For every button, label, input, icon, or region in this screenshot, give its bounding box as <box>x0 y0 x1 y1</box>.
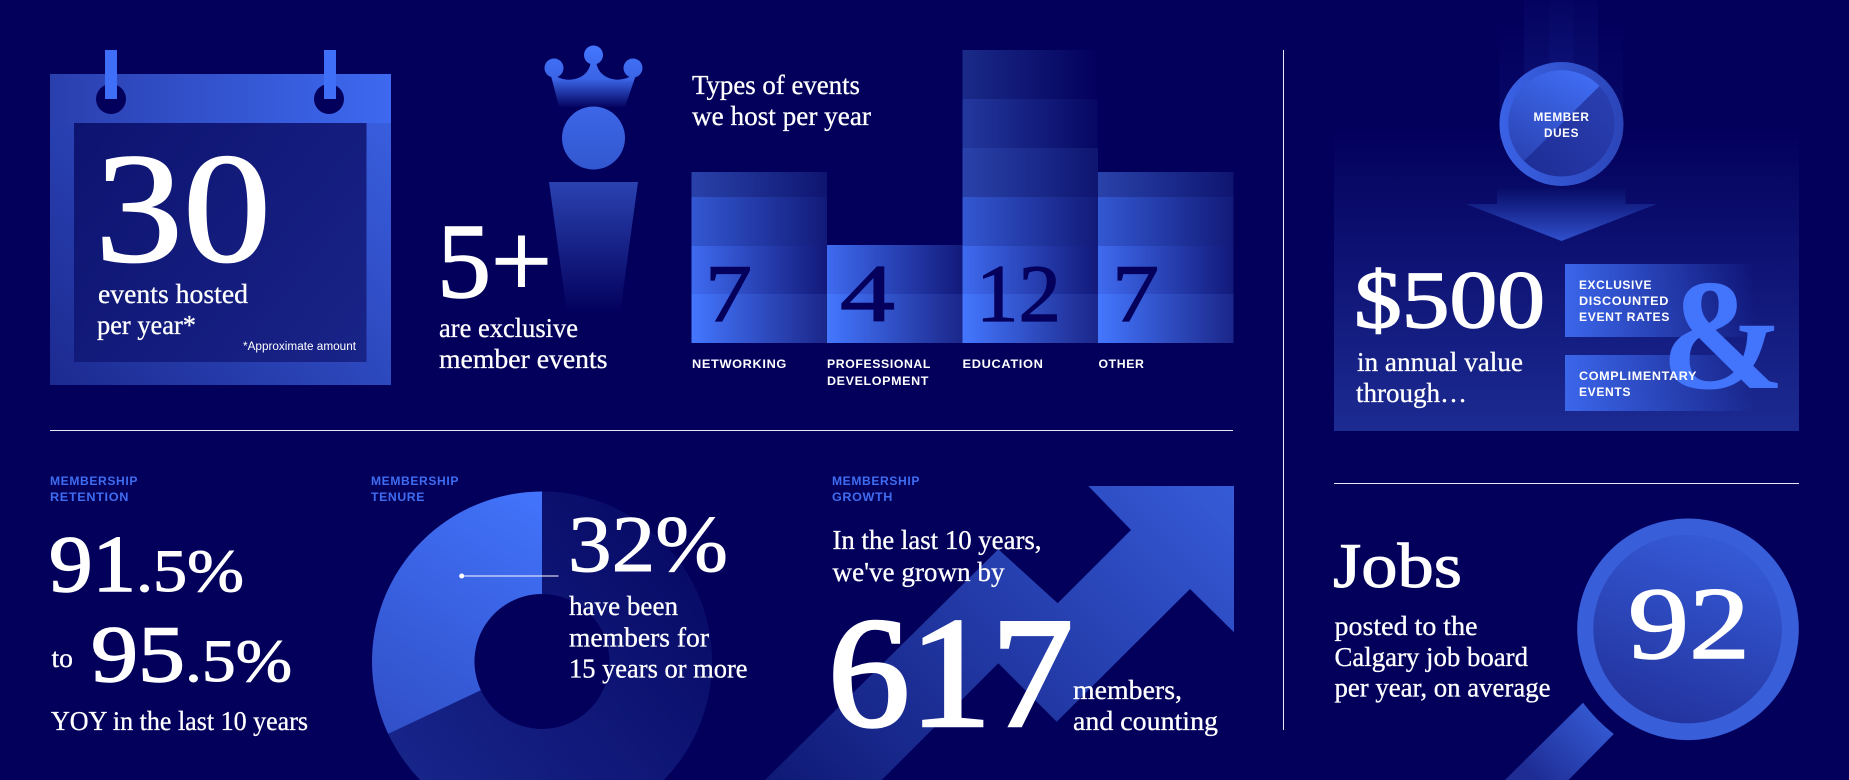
stat 95.5% <box>91 611 292 699</box>
footnote: *Approximate amount <box>243 341 357 353</box>
icon: member dues coin <box>1500 62 1624 186</box>
icon: motion streaks <box>1500 0 1623 140</box>
section label: GROWTH <box>832 490 893 504</box>
caption events hosted: per year* <box>97 310 196 340</box>
icon: magnifying glass <box>1505 518 1799 780</box>
caption jobs <box>1334 611 1551 702</box>
section label: TENURE <box>371 490 425 504</box>
bar labels: OTHER <box>1098 357 1144 371</box>
section label: RETENTION <box>50 490 129 504</box>
bar: education <box>962 50 1098 343</box>
bar chart: types of events <box>692 50 1234 388</box>
icon: member dues coin: MEMBER <box>1534 110 1590 124</box>
calendar inner page <box>74 123 366 362</box>
section label <box>832 474 920 504</box>
caption members <box>1073 675 1218 736</box>
caption events hosted <box>97 279 248 340</box>
calendar binding right <box>314 50 344 114</box>
benefit text: DISCOUNTED <box>1579 294 1669 308</box>
benefit text: COMPLIMENTARY <box>1579 369 1697 383</box>
panel background <box>1334 130 1799 431</box>
stat 92: 92 <box>1628 567 1750 681</box>
bar labels: NETWORKING <box>692 357 787 371</box>
heading Jobs: Jobs <box>1333 530 1462 601</box>
caption members: members, <box>1073 675 1182 705</box>
arrow: down <box>1466 187 1657 241</box>
icon: ampersand: & <box>1661 248 1785 423</box>
bar: networking <box>692 172 827 343</box>
bar: other <box>1098 172 1234 343</box>
caption growth <box>832 525 1042 587</box>
caption events hosted: events hosted <box>98 279 248 309</box>
big number 617: 617 <box>828 586 1073 760</box>
stat 32%: 32% <box>568 501 728 589</box>
stat 91.5%: 91 <box>49 521 136 609</box>
section label: MEMBERSHIP <box>832 474 920 488</box>
section label <box>371 474 459 504</box>
caption growth: we've grown by <box>832 557 1005 587</box>
caption annual value <box>1356 347 1523 408</box>
arrow: growth <box>765 486 1234 780</box>
big number 30: 30 <box>95 121 271 295</box>
bar labels: EDUCATION <box>962 357 1044 371</box>
bar labels: PROFESSIONAL <box>827 357 931 371</box>
benefit box: discounted rates <box>1565 264 1755 337</box>
big number $500: $500 <box>1354 254 1545 345</box>
bar: professional development <box>827 245 962 343</box>
caption jobs: posted to the <box>1334 611 1478 641</box>
section label: MEMBERSHIP <box>50 474 138 488</box>
caption tenure: have been <box>569 591 678 621</box>
benefit text: EXCLUSIVE <box>1579 278 1652 292</box>
panel: membership retention <box>49 474 308 736</box>
bar: education: 12 <box>976 248 1061 339</box>
caption jobs: Calgary job board <box>1334 642 1528 672</box>
stat 95.5%: .5% <box>185 628 292 694</box>
caption tenure <box>569 591 748 684</box>
calendar header strip <box>50 74 391 123</box>
benefit text: EVENTS <box>1579 385 1631 399</box>
caption exclusive: member events <box>439 344 608 374</box>
word to: to <box>52 643 73 673</box>
caption annual value: in annual value <box>1357 347 1523 377</box>
chart heading: we host per year <box>692 101 871 131</box>
caption tenure: members for <box>569 622 709 652</box>
donut chart <box>372 492 712 780</box>
caption growth: In the last 10 years, <box>832 525 1042 555</box>
icon: member dues coin: DUES <box>1544 126 1579 140</box>
caption tenure: 15 years or more <box>569 654 748 684</box>
stat 95.5%: 95 <box>91 611 185 699</box>
icon: crowned figure <box>544 46 642 313</box>
calendar body <box>50 74 391 385</box>
bar: professional development: 4 <box>840 248 895 339</box>
caption exclusive: are exclusive <box>439 313 578 343</box>
panel: membership growth <box>765 474 1234 780</box>
caption jobs: per year, on average <box>1334 672 1551 702</box>
panel: exclusive member events <box>437 46 642 374</box>
caption exclusive <box>439 313 608 374</box>
bar labels <box>692 357 1144 388</box>
bar: networking: 7 <box>705 248 752 339</box>
callout line <box>459 574 558 578</box>
calendar binding left <box>96 50 126 114</box>
section label <box>50 474 138 504</box>
benefit text <box>1579 278 1697 399</box>
section label: MEMBERSHIP <box>371 474 459 488</box>
stat 91.5% <box>49 521 244 609</box>
panel: calendar 30 events <box>50 50 391 385</box>
panel: jobs <box>1333 518 1799 780</box>
panel: membership tenure <box>371 474 748 780</box>
caption members: and counting <box>1073 706 1218 736</box>
stat 91.5%: .5% <box>136 538 244 604</box>
benefit box: complimentary events <box>1565 355 1755 411</box>
benefit text: EVENT RATES <box>1579 310 1670 324</box>
chart heading: Types of events <box>692 70 860 100</box>
bar labels: DEVELOPMENT <box>827 374 929 388</box>
caption YOY: YOY in the last 10 years <box>51 706 308 736</box>
panel: member dues value <box>1334 0 1799 431</box>
big number 5+: 5+ <box>437 203 552 321</box>
chart heading <box>692 70 871 131</box>
caption annual value: through… <box>1356 378 1467 408</box>
bar: other: 7 <box>1112 248 1159 339</box>
